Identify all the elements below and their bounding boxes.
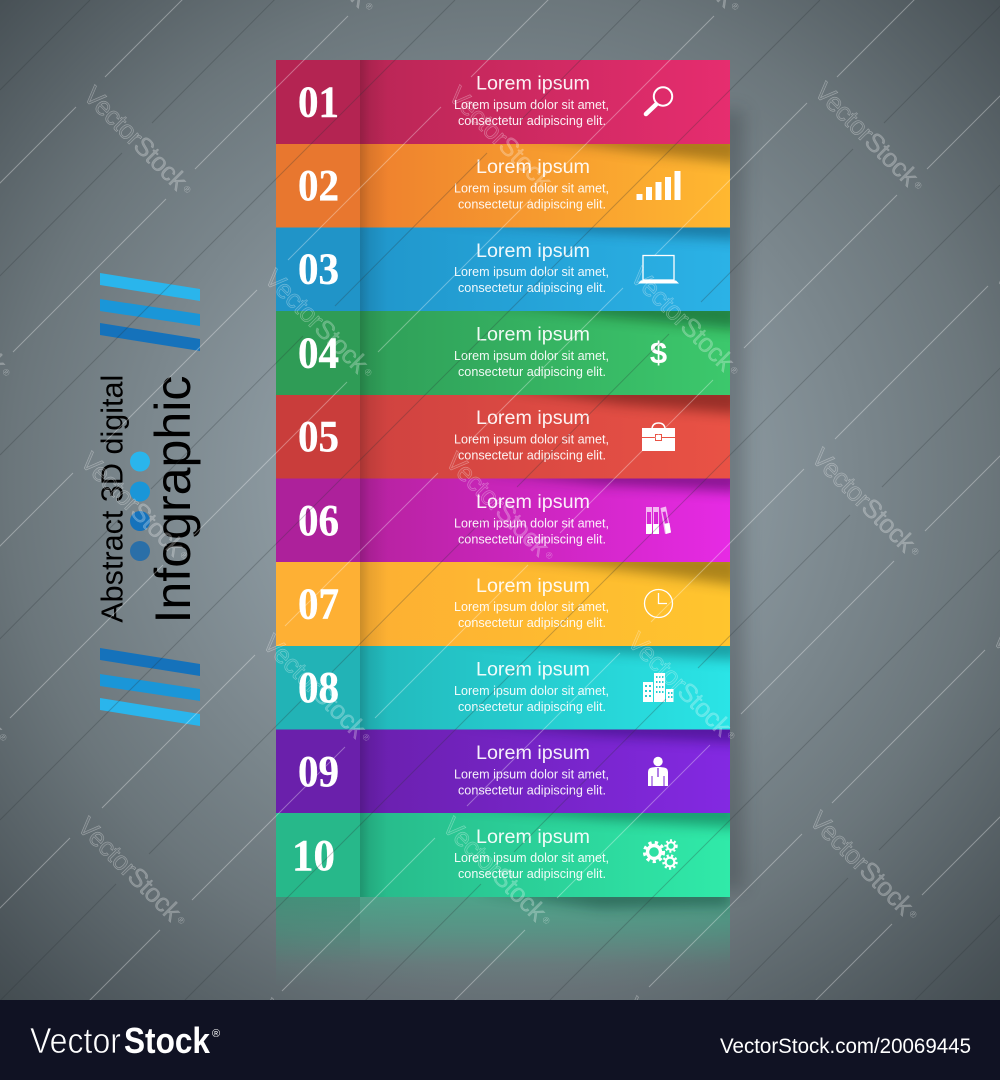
icon: gears <box>645 840 677 868</box>
watermarks: VectorStock <box>78 80 193 195</box>
text block 10 <box>454 827 609 881</box>
footer url: VectorStock.com/20069445 <box>720 1035 971 1058</box>
band 03 <box>276 228 730 311</box>
band 08 <box>276 646 730 730</box>
text block 10: consectetur adipiscing elit. <box>458 867 606 881</box>
icon: laptop <box>638 256 679 284</box>
number 01: 01 <box>298 78 339 126</box>
band 06 <box>276 478 730 562</box>
text block 08: Lorem ipsum <box>476 660 590 680</box>
footer bar <box>0 1000 1000 1080</box>
watermarks: ® <box>181 183 193 195</box>
watermarks: ® <box>175 914 187 926</box>
text block 05: consectetur adipiscing elit. <box>458 448 606 462</box>
watermarks: ® <box>912 179 924 191</box>
watermarks: ® <box>363 0 375 12</box>
number 10: 10 <box>292 831 335 880</box>
panel: stacked bands <box>276 60 740 897</box>
watermarks: VectorStock <box>804 805 919 920</box>
watermarks: VectorStock <box>622 626 737 741</box>
text block 07: consectetur adipiscing elit. <box>458 616 606 630</box>
text block 01: Lorem ipsum <box>476 74 590 94</box>
text block 01: Lorem ipsum dolor sit amet, <box>454 98 609 112</box>
watermarks: ® <box>360 731 372 743</box>
watermarks: VectorStock <box>72 811 187 926</box>
heading: Abstract 3D digital: Abstract 3D digital <box>96 375 130 623</box>
number 06: 06 <box>298 496 339 545</box>
text block 08 <box>454 660 609 714</box>
watermarks: VectorStock <box>806 442 921 557</box>
band 09 <box>276 730 730 813</box>
band 01 <box>276 60 730 144</box>
icon: clock <box>644 590 672 618</box>
heading: Infographic: Infographic <box>145 376 201 624</box>
watermarks: ® <box>729 0 741 12</box>
icon: person <box>648 757 668 786</box>
number 02: 02 <box>298 161 339 210</box>
number 03: 03 <box>298 244 339 294</box>
footer logo: ® <box>212 1028 220 1040</box>
text block 06: Lorem ipsum dolor sit amet, <box>454 516 609 530</box>
watermarks: ® <box>543 549 555 561</box>
text block 05: Lorem ipsum dolor sit amet, <box>454 432 609 446</box>
watermarks: VectorStock <box>75 446 190 561</box>
number 08: 08 <box>298 663 339 712</box>
icon: signal bars <box>636 171 680 200</box>
text block 05: Lorem ipsum <box>476 408 590 429</box>
watermarks: VectorStock <box>809 76 924 191</box>
number 04: 04 <box>298 328 339 378</box>
text block 02 <box>454 157 609 212</box>
text block 09: Lorem ipsum dolor sit amet, <box>454 768 609 782</box>
text block 01: consectetur adipiscing elit. <box>458 114 606 128</box>
text block 08: Lorem ipsum dolor sit amet, <box>454 684 609 698</box>
text block 07: Lorem ipsum dolor sit amet, <box>454 600 609 614</box>
text block 02: Lorem ipsum <box>476 157 590 178</box>
watermarks: ® <box>725 729 737 741</box>
band 07 <box>276 562 730 646</box>
stripes: top <box>100 273 200 351</box>
watermarks: VectorStock <box>259 263 374 378</box>
reflection under the stack <box>276 897 730 960</box>
text block 06 <box>454 492 609 546</box>
text block 03: Lorem ipsum <box>476 241 590 262</box>
watermarks: VectorStock <box>625 261 740 376</box>
text block 09: consectetur adipiscing elit. <box>458 784 606 798</box>
footer logo: Stock <box>124 1020 211 1061</box>
watermarks: ® <box>728 364 740 376</box>
text block 06: consectetur adipiscing elit. <box>458 532 606 546</box>
watermarks: ® <box>362 366 374 378</box>
icon: buildings <box>643 673 674 702</box>
icon: binders <box>646 506 671 534</box>
watermarks: VectorStock <box>443 80 558 195</box>
dots <box>130 452 150 561</box>
text block 09: Lorem ipsum <box>476 743 590 764</box>
watermarks: VectorStock <box>257 628 372 743</box>
number 05: 05 <box>298 412 339 461</box>
watermarks: VectorStock <box>437 811 552 926</box>
text block 07: Lorem ipsum <box>476 576 590 597</box>
text block 01 <box>454 74 609 128</box>
band 04 <box>276 311 730 395</box>
footer logo <box>30 1020 220 1061</box>
text block 03: consectetur adipiscing elit. <box>458 281 606 295</box>
band 10 <box>276 813 730 897</box>
text block 08: consectetur adipiscing elit. <box>458 700 606 714</box>
text block 07 <box>454 576 609 630</box>
band 02 <box>276 144 730 228</box>
number 07: 07 <box>298 580 339 628</box>
text block 02: consectetur adipiscing elit. <box>458 198 606 212</box>
watermarks: ® <box>178 549 190 561</box>
watermarks: ® <box>546 183 558 195</box>
text block 03: Lorem ipsum dolor sit amet, <box>454 265 609 279</box>
watermarks: ® <box>540 914 552 926</box>
text block 04 <box>454 324 609 379</box>
text block 04: Lorem ipsum dolor sit amet, <box>454 349 609 363</box>
text block 03 <box>454 241 609 295</box>
text block 10: Lorem ipsum <box>476 827 590 848</box>
text block 02: Lorem ipsum dolor sit amet, <box>454 182 609 196</box>
text block 04: Lorem ipsum <box>476 324 590 346</box>
icon: magnifier <box>646 87 672 114</box>
text block 10: Lorem ipsum dolor sit amet, <box>454 851 609 865</box>
number 09: 09 <box>298 747 339 796</box>
icon: briefcase <box>642 423 675 451</box>
text block 04: consectetur adipiscing elit. <box>458 365 606 379</box>
icon: dollar: $ <box>650 335 667 370</box>
watermarks: ® <box>907 908 919 920</box>
stripes: bottom <box>100 648 200 726</box>
footer logo: Vector <box>30 1020 121 1061</box>
band 05 <box>276 395 730 478</box>
watermarks: VectorStock <box>440 446 555 561</box>
text block 09 <box>454 743 609 798</box>
watermarks: ® <box>0 366 12 378</box>
text block 05 <box>454 408 609 462</box>
watermarks: ® <box>909 545 921 557</box>
text block 06: Lorem ipsum <box>476 492 590 513</box>
